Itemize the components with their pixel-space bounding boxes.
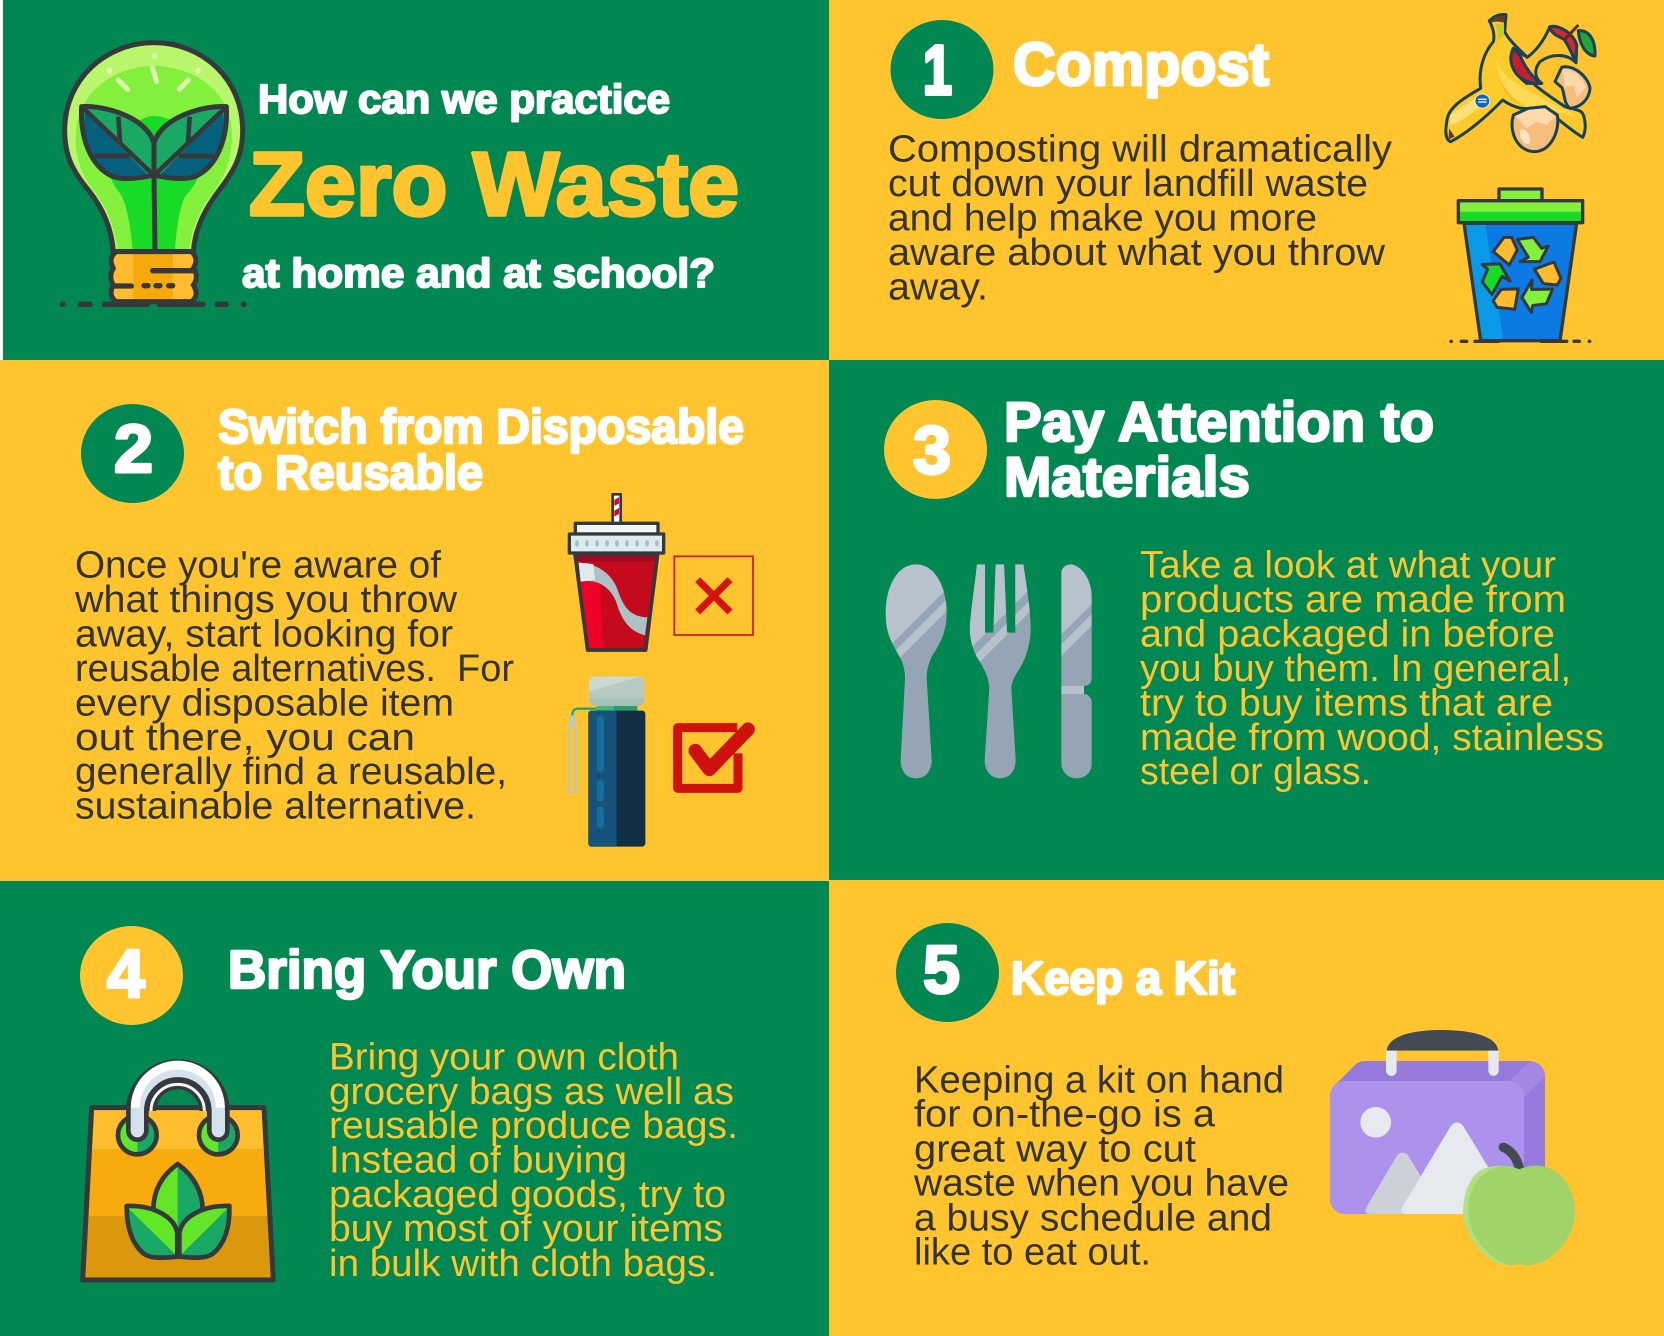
icon: red cross box (674, 556, 753, 635)
text: bring your own description: grocery bags as well as (329, 1071, 734, 1113)
text: bring your own description: packaged goods, try to (329, 1174, 726, 1216)
icon: shopping bag with leaves (83, 1065, 273, 1280)
title line: Zero Waste: Zero Waste (249, 135, 739, 235)
number badge 5: 5 (923, 932, 960, 1008)
number badge 1: 1 (923, 31, 952, 109)
title line: at home and at school?: at home and at school? (242, 250, 715, 296)
icon: red check box (678, 728, 748, 788)
icon: lunch box and apple (1330, 1030, 1575, 1266)
text: reusable alternatives description (74, 544, 514, 828)
text: keep a kit description: waste when you have (913, 1162, 1289, 1204)
number badge 2 (81, 404, 184, 503)
heading: pay attention to materials: Materials (1004, 445, 1250, 508)
heading: pay attention to materials: Pay Attention to (1004, 390, 1434, 453)
number badge 3 (884, 400, 987, 499)
text: compost description: cut down your landfill waste (888, 163, 1368, 205)
text: reusable alternatives description: reusable alternatives. For (75, 648, 514, 690)
text: materials description: you buy them. In general, (1140, 648, 1571, 690)
text: materials description (1140, 544, 1604, 793)
number badge 4 (80, 926, 183, 1025)
title (242, 76, 739, 296)
heading: Compost: Compost (1013, 31, 1269, 98)
text: materials description: try to buy items that are (1140, 682, 1553, 724)
panel: 3 pay attention to materials (829, 360, 1664, 880)
number badge 4: 4 (107, 936, 145, 1012)
panel: 2 switch to reusable (0, 360, 829, 881)
number badge 1 (890, 20, 994, 119)
icon: spoon (886, 564, 947, 778)
text: materials description: steel or glass. (1140, 751, 1371, 793)
text: compost description: away. (888, 266, 988, 308)
icons: disposable cup and reusable bottle (569, 494, 753, 847)
text: reusable alternatives description: out there, you can (75, 717, 415, 759)
recycling symbol (1475, 237, 1566, 317)
text: keep a kit description: great way to cut (914, 1128, 1196, 1170)
text: reusable alternatives description: away, start looking for (75, 614, 453, 656)
number badge 2: 2 (114, 411, 153, 487)
heading: switch from disposable to reusable: to Reusable (218, 447, 483, 500)
text: reusable alternatives description: sustainable alternative. (75, 786, 476, 828)
icon: reusable water bottle (569, 677, 645, 847)
text: bring your own description: in bulk with cloth bags. (329, 1243, 717, 1285)
title line: How can we practice: How can we practice (258, 76, 670, 122)
text: materials description: products are made from (1140, 579, 1566, 621)
text: reusable alternatives description: Once you're aware of (75, 544, 441, 586)
number badge 3: 3 (913, 412, 951, 488)
text: reusable alternatives description: generally find a reusable, (75, 751, 507, 793)
text: compost description: and help make you more (888, 198, 1317, 240)
panel: 4 bring your own (0, 881, 829, 1336)
text: bring your own description: Bring your own cloth (329, 1036, 679, 1078)
text: materials description: made from wood, stainless (1140, 717, 1604, 759)
text: bring your own description (329, 1036, 738, 1285)
icon: disposable cup (569, 494, 664, 650)
panel: 1 compost (829, 0, 1664, 360)
text: bring your own description: Instead of buying (329, 1140, 627, 1182)
heading: keep a kit: Keep a Kit (1011, 952, 1235, 1004)
text: bring your own description: reusable produce bags. (329, 1105, 738, 1147)
text: keep a kit description: for on-the-go is a (914, 1094, 1216, 1136)
text: reusable alternatives description: every disposable item (75, 682, 454, 724)
text: materials description: and packaged in before (1140, 614, 1555, 656)
text: bring your own description: buy most of your items (329, 1208, 723, 1250)
panel: header (0, 0, 829, 360)
icon: spoon, fork and knife (886, 564, 1092, 778)
heading: pay attention to materials (1004, 390, 1434, 508)
panel: 5 keep a kit (829, 880, 1664, 1336)
text: keep a kit description (913, 1060, 1289, 1274)
text: keep a kit description: like to eat out. (914, 1232, 1151, 1274)
text: reusable alternatives description: what things you throw (74, 579, 458, 621)
icon: fork (970, 564, 1031, 778)
icon: knife (1061, 564, 1092, 778)
text: keep a kit description: Keeping a kit on hand (914, 1060, 1284, 1102)
heading: bring your own: Bring Your Own (228, 940, 626, 1000)
heading: switch from disposable to reusable: Switch from Disposable (218, 401, 744, 454)
text: materials description: Take a look at what your (1140, 544, 1556, 586)
icon: food scraps (1446, 14, 1595, 152)
text: compost description: Composting will dramatically (888, 128, 1392, 170)
text: compost description: aware about what you throw (888, 232, 1386, 274)
text: compost description (888, 128, 1392, 308)
text: keep a kit description: a busy schedule and (914, 1198, 1272, 1240)
icon: light bulb with leaves (63, 43, 244, 304)
number badge 5 (896, 923, 999, 1022)
icon: recycling bin (1451, 189, 1590, 341)
heading: switch from disposable to reusable (218, 401, 744, 500)
